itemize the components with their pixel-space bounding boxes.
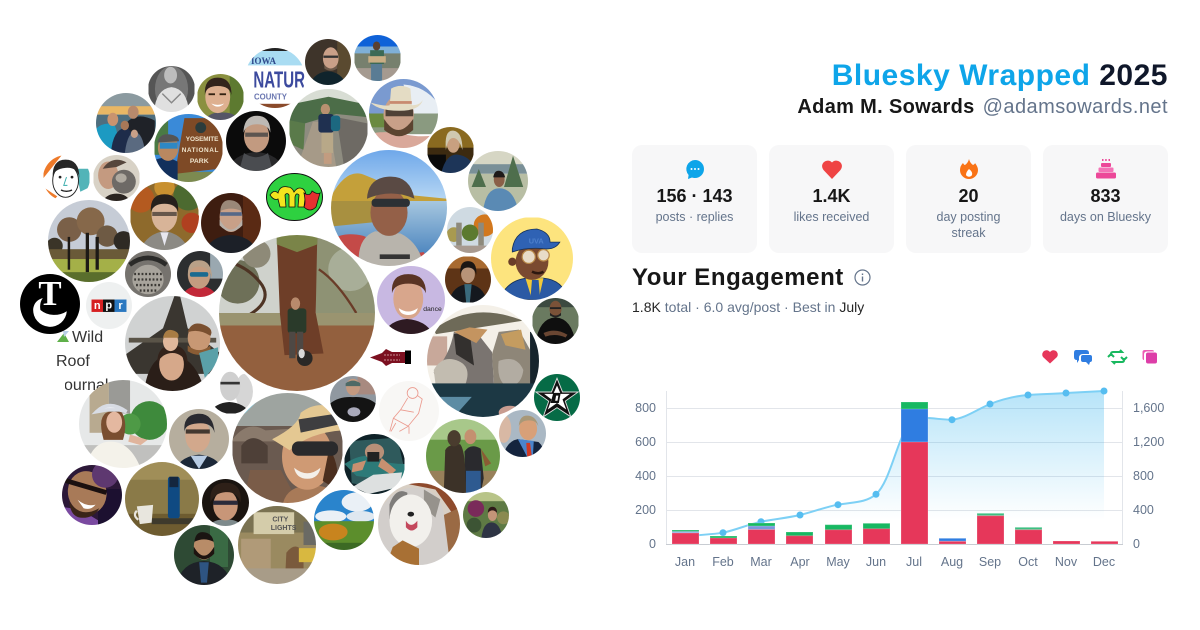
icon: green mascot logo [266, 173, 323, 221]
avatar: grey-scale man in white shirt [148, 66, 194, 112]
right axis labels: 800 [1133, 469, 1154, 483]
avatar: man at Yosemite sign: NATIONAL [182, 147, 218, 154]
avatar: mirror selfie with camera [344, 434, 404, 494]
broken image alt text: Wild Roof Journal: Wild [72, 329, 103, 346]
month labels: Sep [979, 555, 1001, 569]
month labels: Jul [906, 555, 922, 569]
right axis labels: 1,600 [1133, 401, 1164, 415]
avatar: man with dark hair in restaurant [445, 256, 491, 302]
avatar: grey-haired man on black [226, 111, 286, 171]
avatar: woman among purple flowers [463, 492, 509, 538]
icon: fountain pen nib logo [370, 349, 411, 366]
month labels: Apr [790, 555, 810, 569]
avatar: hiker on trail [290, 89, 368, 167]
right axis labels: 400 [1133, 503, 1154, 517]
icon: legend quotes [1142, 350, 1157, 364]
avatar: hiker holding a sign [354, 35, 400, 81]
avatar: person in black tee [330, 376, 376, 422]
left axis labels: 800 [635, 401, 656, 415]
avatar: mural with City Lights sign [238, 506, 316, 584]
avatar: man at Yosemite sign [154, 114, 222, 182]
panel: days on Bluesky: 833 [1090, 186, 1121, 206]
avatar: donkeys looking into car window [427, 305, 539, 417]
avatar: man by lake in denim [468, 151, 528, 211]
avatar: thermos and mug on sand [125, 462, 199, 536]
panel: posts and replies: 156 · 143 [656, 186, 733, 206]
avatar: New York Times logo [20, 274, 80, 334]
avatar: woman in blue sunglasses [177, 251, 223, 297]
legend: engagement types [1040, 347, 1164, 367]
icon: info [854, 269, 871, 286]
avatar: NPR logo: n [94, 300, 101, 312]
month labels: Dec [1093, 555, 1115, 569]
icon: heart [820, 158, 842, 180]
icon: legend reposts [1108, 350, 1127, 364]
avatar: woman in navy blazer [428, 127, 474, 173]
avatar: lake selfie in cap [331, 150, 447, 266]
avatar: meadow and blue sky [314, 490, 374, 550]
icon: birthday cake [1094, 158, 1116, 180]
avatar: NPR logo [86, 282, 132, 329]
left axis labels [635, 401, 656, 551]
avatar: couple with bronze statue [426, 419, 500, 493]
panel: likes received: likes received [794, 210, 869, 224]
avatar: woman on purple backdrop: dance [423, 306, 442, 313]
avatar: family at sunset [96, 93, 156, 153]
panel: likes received [769, 145, 894, 253]
month labels: Jan [675, 555, 695, 569]
month labels: Oct [1018, 555, 1038, 569]
panel: posts and replies [632, 145, 757, 253]
avatar: autumn trees [48, 200, 130, 282]
broken image alt text: Wild Roof Journal [57, 330, 108, 390]
month labels: Feb [712, 555, 734, 569]
avatar: man with beard in dark jacket [174, 525, 234, 585]
avatar: owl feathers [125, 251, 171, 297]
avatar: Dallas Stars logo [534, 374, 580, 421]
avatar: Australian shepherd dog [378, 483, 460, 565]
avatar: mural with City Lights sign: CITY [272, 517, 289, 524]
avatar: cartoon man in UVA cap [491, 218, 573, 300]
avatar: Iowa Nature license plate [248, 48, 305, 108]
avatar: man with curly hair and glasses [202, 479, 249, 526]
avatar: cartoon man in UVA cap: UVA [529, 237, 544, 246]
subtitle: name and handle: Adam M. Sowards @adamsowards.net [797, 96, 1168, 118]
broken image alt text: Wild Roof Journal: Roof [56, 353, 90, 370]
avatar: man with autumn leaves [130, 182, 199, 250]
right axis labels: 1,200 [1133, 435, 1164, 449]
chart: monthly engagement bars and cumulative line [620, 380, 1190, 580]
text: engagement summary: 1.8K total · 6.0 avg/post · Best in July [632, 299, 864, 315]
avatar: man in suit with red tie [499, 410, 546, 457]
avatar: purple-lit smiling man with glasses [62, 465, 122, 525]
left axis labels: 600 [635, 435, 656, 449]
avatar: man in cowboy hat [369, 79, 438, 148]
title: Bluesky Wrapped 2025 [832, 59, 1168, 92]
month labels: Aug [941, 555, 963, 569]
avatar: woman in straw hat on stone bridge [232, 393, 342, 503]
avatar: bald man with glasses [305, 39, 351, 85]
icon: legend replies [1074, 350, 1092, 365]
icon: legend heart [1042, 350, 1058, 364]
cumulative line [685, 391, 1104, 536]
avatar: campus gate in autumn [447, 207, 493, 253]
broken image alt text: Wild Roof Journal: Journal [56, 377, 108, 394]
stacked bars [672, 402, 1118, 544]
avatar: New York Times logo: T [38, 274, 62, 313]
left axis labels: 200 [635, 503, 656, 517]
cumulative area [685, 391, 1104, 544]
avatar: man with grey goatee in dark jacket [201, 193, 261, 253]
avatar: man with owl [94, 155, 140, 201]
panel: day posting streak: day posting [937, 210, 1000, 224]
avatar: man in black shirt with crossed arms [532, 298, 578, 344]
month labels: May [826, 555, 851, 569]
month labels: Nov [1055, 555, 1078, 569]
avatar: NPR logo: r [118, 300, 123, 312]
avatar: Iowa Nature license plate: IOWA [251, 56, 277, 66]
panel: likes received: 1.4K [812, 186, 851, 206]
avatar: cartoon face with orange stripes [44, 156, 90, 198]
avatar: NPR logo: p [105, 299, 112, 311]
avatar: smiling man [198, 74, 244, 120]
avatar: man with grey jacket and glasses [169, 409, 229, 469]
month labels [675, 555, 1115, 569]
right axis labels: 0 [1133, 537, 1140, 551]
panel: day posting streak [906, 145, 1031, 253]
avatar: family at Eiffel Tower [125, 296, 220, 391]
avatar: black-and-white bald man [214, 372, 253, 414]
heading: Your Engagement: Your Engagement [632, 264, 844, 291]
month labels: Jun [866, 555, 886, 569]
panel: days on Bluesky [1043, 145, 1168, 253]
avatar: woman on purple backdrop [377, 266, 445, 334]
panel: day posting streak: 20 [958, 186, 979, 206]
panel: days on Bluesky: days on Bluesky [1060, 210, 1151, 224]
line markers [720, 388, 1108, 536]
month labels: Mar [750, 555, 772, 569]
panel: posts and replies: posts · replies [656, 210, 733, 224]
avatar: mural with City Lights sign: LIGHTS [271, 525, 297, 532]
avatar: red line sketch of a reclining figure [379, 381, 439, 441]
avatar: man at Yosemite sign: YOSEMITE [186, 136, 219, 143]
left axis labels: 0 [649, 537, 656, 551]
avatar: man at Yosemite sign: PARK [190, 158, 209, 165]
icon: speech bubble [684, 158, 706, 180]
right axis labels [1133, 401, 1164, 551]
avatar: Iowa Nature license plate: COUNTY [254, 93, 288, 102]
avatar: central man beside large pine tree [219, 235, 375, 391]
icon: flame [958, 158, 980, 180]
left axis labels: 400 [635, 469, 656, 483]
avatar: woman in white sun hat [79, 380, 167, 468]
panel: day posting streak: streak [951, 226, 986, 240]
